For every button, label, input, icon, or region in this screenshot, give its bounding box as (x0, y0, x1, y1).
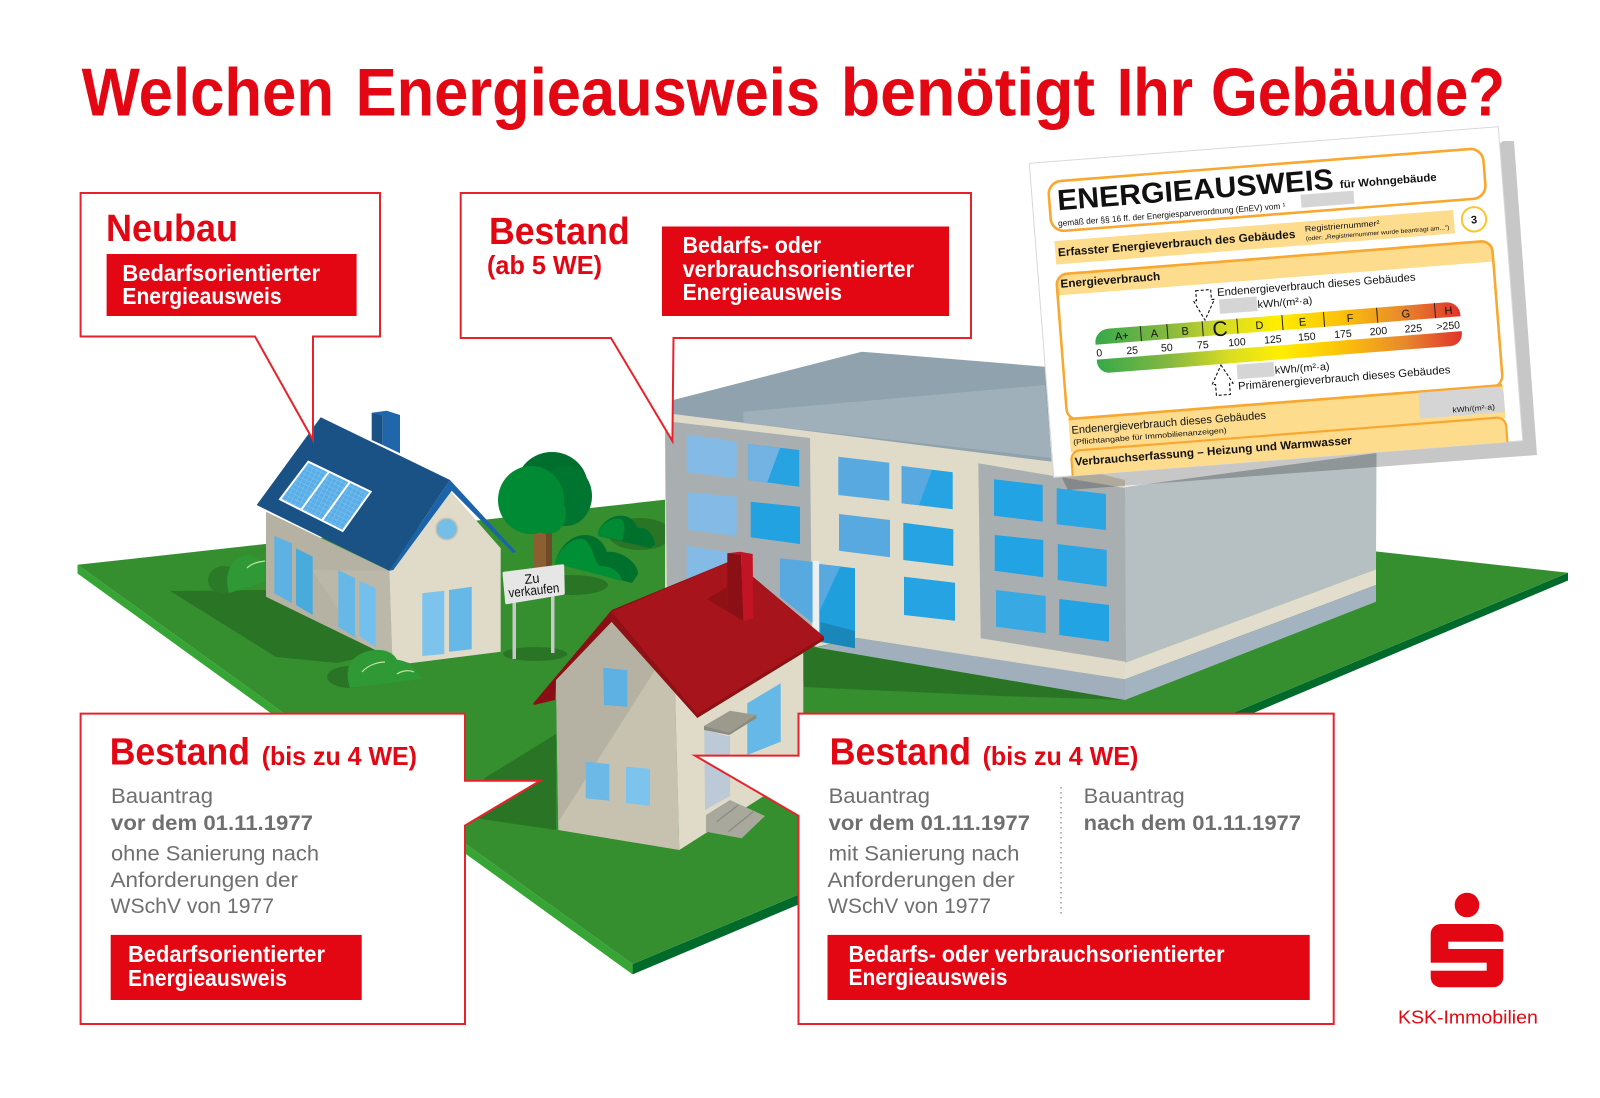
label: Bedarfs- oder verbrauchsorientierter Energieausweis: Energieausweis (848, 964, 1008, 990)
gable wall (556, 622, 679, 850)
energy scale upper bar: D (1255, 320, 1264, 332)
roof (612, 560, 824, 718)
left window frame (665, 421, 812, 645)
title: benötigt (841, 54, 1095, 130)
title: Energieausweis (356, 54, 820, 130)
energy scale upper bar: F (1346, 313, 1354, 325)
front wall (389, 491, 501, 663)
blue house (Neubau) (257, 411, 516, 663)
criteria text: left column: Anforderungen der (828, 869, 1015, 892)
final energy label: Endenergieverbrauch dieses Gebäudes (1217, 272, 1417, 299)
certificate shadow (1062, 141, 1537, 490)
energy scale numbers: 150 (1298, 331, 1316, 344)
energy consumption panel (1056, 241, 1503, 420)
heading: Bestand ab 5 WE: (ab 5 WE) (487, 250, 602, 280)
energy scale numbers: 125 (1264, 333, 1282, 347)
consumption band: Erfasster Energieverbrauch des Gebäudes (1058, 229, 1296, 259)
red house (Bestand) (533, 552, 824, 850)
criteria text: left column (828, 785, 1030, 918)
heading: Bestand bis zu 4 WE: Bestand (830, 731, 971, 773)
energy scale numbers: 225 (1404, 322, 1423, 336)
energy scale numbers: 175 (1334, 328, 1352, 341)
label: Bedarfs- oder verbrauchsorientierter Energieausweis: Bedarfs- oder verbrauchsorientierter (848, 941, 1225, 967)
building roof (673, 352, 1052, 462)
certificate header (1048, 148, 1486, 232)
energy scale upper bar: A (1150, 328, 1159, 340)
energy scale upper bar: B (1181, 325, 1189, 338)
consumption band: Registriernummer² (1304, 219, 1380, 234)
door (704, 730, 730, 810)
heading: Bestand ab 5 WE (487, 211, 630, 280)
energy scale upper bar (1094, 299, 1461, 351)
label: Bedarfsorientierter Energieausweis: Energieausweis (128, 965, 287, 991)
criteria text (110, 785, 319, 918)
certificate header: für Wohngebäude (1339, 172, 1437, 191)
criteria text: Anforderungen der (110, 869, 298, 892)
energy scale numbers: 75 (1197, 339, 1209, 352)
primary energy label: Primärenergieverbrauch dieses Gebäudes (1238, 364, 1451, 393)
label: Bedarfsorientierter Energieausweis: Bedarfsorientierter (128, 941, 325, 967)
energy scale upper bar: A+ (1115, 330, 1129, 343)
ground plane (78, 486, 1568, 974)
energy scale upper bar: C (1212, 317, 1229, 342)
energy scale numbers: >250 (1436, 319, 1461, 333)
house windows (274, 536, 472, 656)
criteria text: left column: mit Sanierung nach (829, 843, 1019, 866)
heading: Bestand bis zu 4 WE: Bestand (110, 731, 250, 773)
building facade (665, 410, 1125, 680)
criteria text: right column: Bauantrag (1084, 785, 1185, 808)
consumption band (1054, 210, 1455, 265)
steps (706, 800, 765, 838)
criteria text: left column: Bauantrag (829, 785, 930, 808)
certificate header: ENERGIEAUSWEIS (1056, 164, 1335, 217)
energy scale numbers: 100 (1228, 336, 1246, 349)
label: Bedarfsorientierter Energieausweis (107, 254, 357, 316)
heading: Bestand bis zu 4 WE (830, 731, 1138, 773)
energy scale upper bar: E (1298, 316, 1307, 329)
title: Ihr (1117, 54, 1193, 130)
roof overhang (533, 610, 612, 705)
heading: Neubau: Neubau (106, 208, 238, 250)
canopy (704, 711, 757, 735)
energy scale upper bar: G (1401, 308, 1411, 321)
title (82, 54, 1505, 130)
callout: Bestand bis zu 4 WE, ohne Sanierung (81, 714, 540, 1024)
side wall (266, 512, 392, 658)
final energy band: kWh/(m²·a) (1452, 402, 1496, 415)
label: Bedarfs- oder verbrauchsorientierter Energieausweis: Bedarfs- oder (683, 232, 821, 258)
metering band (1071, 417, 1507, 476)
heading: Bestand ab 5 WE: Bestand (489, 211, 630, 253)
energy scale numbers (1096, 319, 1461, 360)
sign: zu verkaufen: verkaufen (508, 580, 560, 600)
logo: Sparkasse (1398, 893, 1538, 1028)
building side wall (1125, 453, 1376, 700)
metering band: Verbrauchserfassung – Heizung und Warmwasser (1074, 435, 1353, 469)
final energy arrow (1193, 289, 1216, 321)
right window frame (978, 463, 1126, 662)
criteria text: left column: WSchV von 1977 (828, 895, 991, 918)
criteria text: Bauantrag (111, 785, 213, 808)
final energy band: (Pflichtangabe für Immobilienanzeigen) (1073, 426, 1228, 447)
sign: zu verkaufen: Zu (524, 570, 540, 587)
page number badge: 3 (1471, 214, 1478, 227)
bushes behind the sign (555, 516, 655, 583)
criteria text: right column: nach dem 01.11.1977 (1084, 812, 1301, 835)
callout: Neubau (81, 193, 380, 440)
energy scale numbers: 200 (1369, 325, 1388, 338)
label: Bedarfs- oder verbrauchsorientierter Energieausweis: Energieausweis (683, 279, 842, 305)
logo text: KSK-Immobilien (1398, 1008, 1538, 1028)
consumption band: (oder: „Registriernummer wurde beantragt am...") (1306, 225, 1450, 243)
criteria text: right column (1084, 785, 1301, 835)
bush in front of blue house (348, 650, 422, 688)
primary energy label: kWh/(m²·a) (1274, 361, 1330, 377)
label: Bedarfsorientierter Energieausweis: Energieausweis (122, 283, 282, 309)
roof (257, 417, 516, 571)
label: Bedarfs- oder verbrauchsorientierter Energieausweis (662, 226, 949, 316)
heading: Bestand bis zu 4 WE: (bis zu 4 WE) (983, 741, 1138, 771)
right wall (675, 653, 803, 850)
title: Welchen (82, 54, 334, 130)
final energy label (1217, 272, 1418, 314)
title: Gebäude? (1211, 54, 1505, 130)
energy scale numbers: 25 (1126, 344, 1139, 357)
label: Bedarfs- oder verbrauchsorientierter Energieausweis: verbrauchsorientierter (683, 256, 914, 282)
callout: Bestand ab 5 WE (461, 193, 971, 441)
tree (498, 452, 592, 568)
heading: Bestand bis zu 4 WE: (bis zu 4 WE) (262, 741, 417, 771)
primary energy arrow (1211, 364, 1234, 396)
building windows (687, 434, 1109, 648)
bush beside blue house (227, 555, 265, 593)
solar panel (280, 462, 371, 531)
energy scale numbers: 0 (1096, 347, 1103, 360)
sign: zu verkaufen (504, 566, 563, 659)
label: Bedarfsorientierter Energieausweis (111, 935, 362, 1000)
red chimney (727, 552, 753, 621)
heading: Bestand bis zu 4 WE (110, 731, 417, 773)
energy certificate (1029, 127, 1523, 477)
round window (436, 518, 457, 540)
final energy label: kWh/(m²·a) (1257, 295, 1313, 311)
chimney (372, 411, 400, 453)
primary energy label (1236, 348, 1451, 393)
label: Bedarfs- oder verbrauchsorientierter Energieausweis (828, 935, 1310, 1000)
energy scale numbers: 50 (1161, 342, 1173, 355)
energy scale lower bar (1097, 331, 1463, 374)
label: Bedarfsorientierter Energieausweis: Bedarfsorientierter (122, 260, 320, 286)
office building (665, 352, 1376, 700)
energy consumption panel: Energieverbrauch (1060, 271, 1161, 291)
criteria text: ohne Sanierung nach (111, 843, 319, 866)
final energy band: Endenergieverbrauch dieses Gebäudes (1071, 410, 1267, 437)
criteria text: left column: vor dem 01.11.1977 (829, 812, 1030, 835)
criteria text: WSchV von 1977 (110, 895, 274, 918)
criteria text: vor dem 01.11.1977 (111, 812, 313, 835)
page number badge (1461, 206, 1487, 232)
callout: Bestand bis zu 4 WE, mit Sanierung oder nach 1977 (695, 714, 1334, 1024)
energy scale upper bar: H (1444, 305, 1453, 317)
red house windows (586, 668, 781, 806)
certificate header: gemäß der §§ 16 ff. der Energiesparverordnung (EnEV) vom ¹ (1058, 201, 1286, 228)
building plinth (817, 638, 1125, 700)
final energy band (1068, 385, 1506, 452)
